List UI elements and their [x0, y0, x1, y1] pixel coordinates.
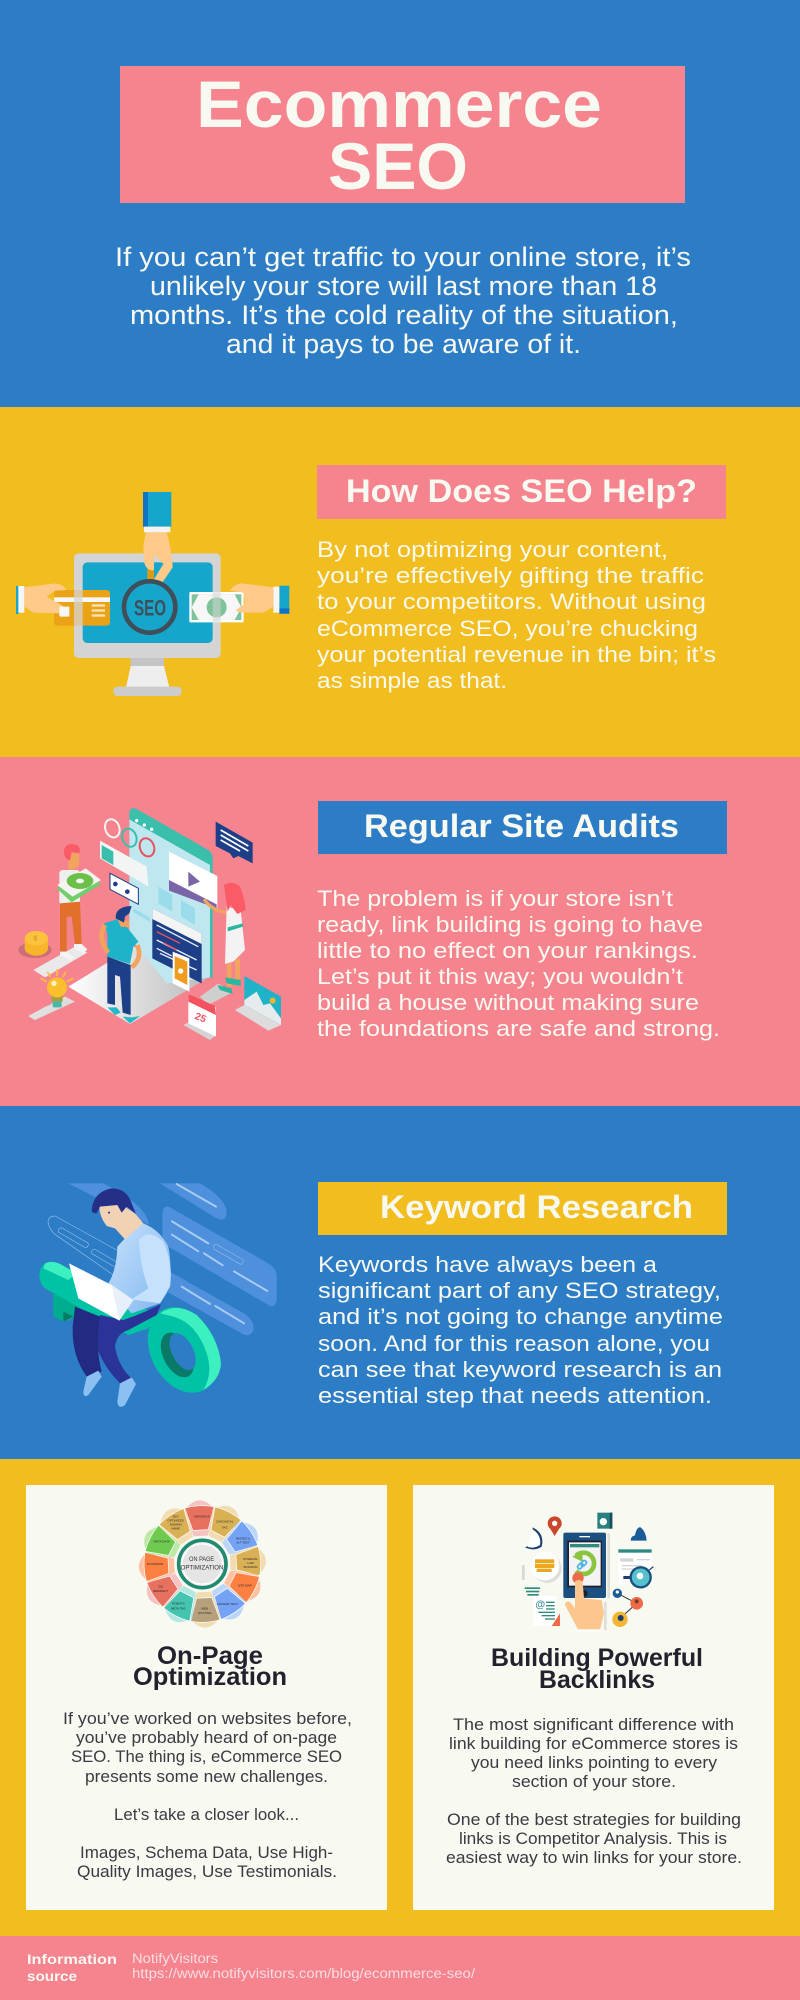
heading: how does SEO help [317, 465, 726, 519]
text: on-page optimization: Images, Schema Data, Use High- [80, 1844, 333, 1862]
chart: on-page optimization wheel: HOSTING [198, 1611, 212, 1615]
text: keyword research: soon. And for this reason alone, you [318, 1331, 710, 1356]
chart: on-page optimization wheel: META DATA [154, 1539, 170, 1543]
intro text: If you can’t get traffic to your online store, it’s [115, 242, 691, 272]
text: keyword research: Keywords have always been a [318, 1252, 658, 1277]
text: information source label: Information [27, 1951, 117, 1967]
text: how does SEO help: to your competitors. Without using [317, 589, 706, 614]
text: building powerful backlinks [446, 1716, 742, 1867]
text: regular site audits: build a house without making sure [317, 990, 699, 1015]
panel: on-page optimization card [26, 1485, 387, 1910]
heading: building powerful backlinks: Backlinks [539, 1666, 655, 1694]
intro text: and it pays to be aware of it. [226, 329, 581, 359]
chart: on-page optimization wheel: META TAG [171, 1606, 186, 1610]
chart: on-page optimization wheel: ROBOTS [172, 1602, 185, 1606]
text: source details: https://www.notifyvisitors.com/blog/ecommerce-seo/ [132, 1966, 475, 1981]
heading: building powerful backlinks: Building Powerful [491, 1644, 703, 1672]
chart: on-page optimization wheel: WEB [201, 1606, 208, 1610]
text: on-page optimization [63, 1710, 352, 1881]
icon: backlinks phone with hand: @ [535, 1599, 545, 1610]
text: how does SEO help [317, 537, 716, 693]
text: on-page optimization: If you’ve worked on websites before, [63, 1710, 352, 1728]
text: on-page optimization: Quality Images, Use Testimonials. [77, 1863, 337, 1881]
chart: on-page optimization wheel: TAG [222, 1526, 228, 1530]
chart: on-page optimization wheel: LINK [247, 1561, 254, 1565]
text: regular site audits: The problem is if your store isn’t [317, 886, 674, 911]
heading: building powerful backlinks [491, 1644, 703, 1694]
panel: building powerful backlinks card [413, 1485, 774, 1910]
heading: keyword research: Keyword Research [380, 1189, 693, 1225]
text: how does SEO help: you’re effectively gifting the traffic [317, 563, 704, 588]
icon: isometric site audit team [18, 808, 281, 1040]
chart: on-page optimization wheel: CANONICAL [216, 1519, 234, 1523]
title: Ecommerce [196, 67, 602, 141]
intro text: unlikely your store will last more than 18 [150, 271, 657, 301]
chart: on-page optimization wheel: HEADINGS [194, 1514, 210, 1518]
title: SEO [328, 129, 468, 203]
icon: backlinks phone with hand [522, 1513, 653, 1632]
panel: header [0, 0, 800, 407]
chart: on-page optimization wheel: SEO [173, 1514, 179, 1518]
heading: how does SEO help: How Does SEO Help? [346, 473, 697, 509]
chart: on-page optimization wheel: NAME [171, 1526, 180, 1530]
icon: person with laptop on key [39, 1183, 277, 1407]
chart: on-page optimization wheel: SITE MAP [238, 1584, 252, 1588]
text: keyword research: can see that keyword research is an [318, 1357, 722, 1382]
chart: on-page optimization wheel [138, 1500, 267, 1628]
text: on-page optimization: presents some new challenges. [85, 1768, 328, 1786]
panel: regular site audits [0, 757, 800, 1106]
text: on-page optimization: Let’s take a closer look... [114, 1806, 299, 1824]
intro text [115, 242, 691, 359]
chart: on-page optimization wheel: BUILDING [244, 1565, 258, 1569]
chart: on-page optimization wheel: DOMAIN [170, 1522, 182, 1526]
heading: on-page optimization: Optimization [133, 1663, 287, 1691]
chart: on-page optimization wheel: ON PAGE [189, 1556, 215, 1563]
heading: on-page optimization: On-Page [157, 1642, 263, 1670]
title [120, 66, 685, 203]
text: regular site audits: the foundations are safe and strong. [317, 1016, 720, 1041]
icon: SEO monitor with hands: SEO [134, 596, 166, 621]
chart: on-page optimization wheel: INTERNAL [243, 1557, 258, 1561]
panel: how does SEO help [0, 407, 800, 757]
text: keyword research: significant part of any SEO strategy, [318, 1278, 721, 1303]
icon: isometric site audit team: 25 [193, 1011, 208, 1026]
chart: on-page optimization wheel: 301 [158, 1584, 163, 1588]
text: information source label: source [27, 1968, 77, 1984]
text: how does SEO help: as simple as that. [317, 668, 507, 693]
text: on-page optimization: you’ve probably heard of on-page [76, 1729, 337, 1747]
text: building powerful backlinks: section of your store. [512, 1773, 676, 1791]
text: regular site audits: Let’s put it this way; you wouldn’t [317, 964, 684, 989]
chart: on-page optimization wheel: REDIRECT [153, 1589, 168, 1593]
text: how does SEO help: By not optimizing your content, [317, 537, 668, 562]
chart: on-page optimization wheel: ALT TEXT [236, 1540, 250, 1544]
text: how does SEO help: eCommerce SEO, you’re chucking [317, 616, 698, 641]
text: on-page optimization: SEO. The thing is, eCommerce SEO [71, 1748, 342, 1766]
text: regular site audits: ready, link building is going to have [317, 912, 703, 937]
heading: on-page optimization [133, 1642, 287, 1691]
text: keyword research [318, 1252, 723, 1408]
chart: on-page optimization wheel: OPTIMIZATION [181, 1564, 224, 1571]
text: building powerful backlinks: links is Competitor Analysis. This is [459, 1830, 727, 1848]
text: regular site audits [317, 886, 720, 1041]
text: building powerful backlinks: One of the best strategies for building [447, 1811, 741, 1829]
text: building powerful backlinks: you need links pointing to every [471, 1754, 718, 1772]
heading: regular site audits [318, 801, 727, 854]
panel: cards background [0, 1459, 800, 1936]
text: information source label [27, 1951, 117, 1984]
text: keyword research: and it’s not going to change anytime [318, 1304, 723, 1329]
panel: footer [0, 1936, 800, 2000]
icon: isometric site audit team: $ [33, 934, 37, 943]
chart: on-page optimization wheel: ANCHOR TEXT [217, 1602, 238, 1606]
chart: on-page optimization wheel: OPTIMIZED [168, 1518, 185, 1522]
text: how does SEO help: your potential revenue in the bin; it’s [317, 642, 716, 667]
text: keyword research: essential step that needs attention. [318, 1383, 712, 1408]
text: building powerful backlinks: The most significant difference with [453, 1716, 734, 1734]
icon: SEO monitor with hands [16, 492, 289, 696]
heading: regular site audits: Regular Site Audits [364, 808, 679, 844]
intro text: months. It’s the cold reality of the situation, [130, 300, 678, 330]
text: building powerful backlinks: link building for eCommerce stores is [449, 1735, 738, 1753]
chart: on-page optimization wheel: IMAGES & [236, 1536, 250, 1540]
heading: keyword research [318, 1182, 727, 1235]
panel: keyword research [0, 1106, 800, 1459]
text: regular site audits: little to no effect on your rankings. [317, 938, 698, 963]
text: source details: NotifyVisitors [132, 1951, 218, 1966]
text: source details [132, 1951, 475, 1981]
text: building powerful backlinks: easiest way to win links for your store. [446, 1849, 742, 1867]
chart: on-page optimization wheel: 404 ERROR [147, 1562, 164, 1566]
